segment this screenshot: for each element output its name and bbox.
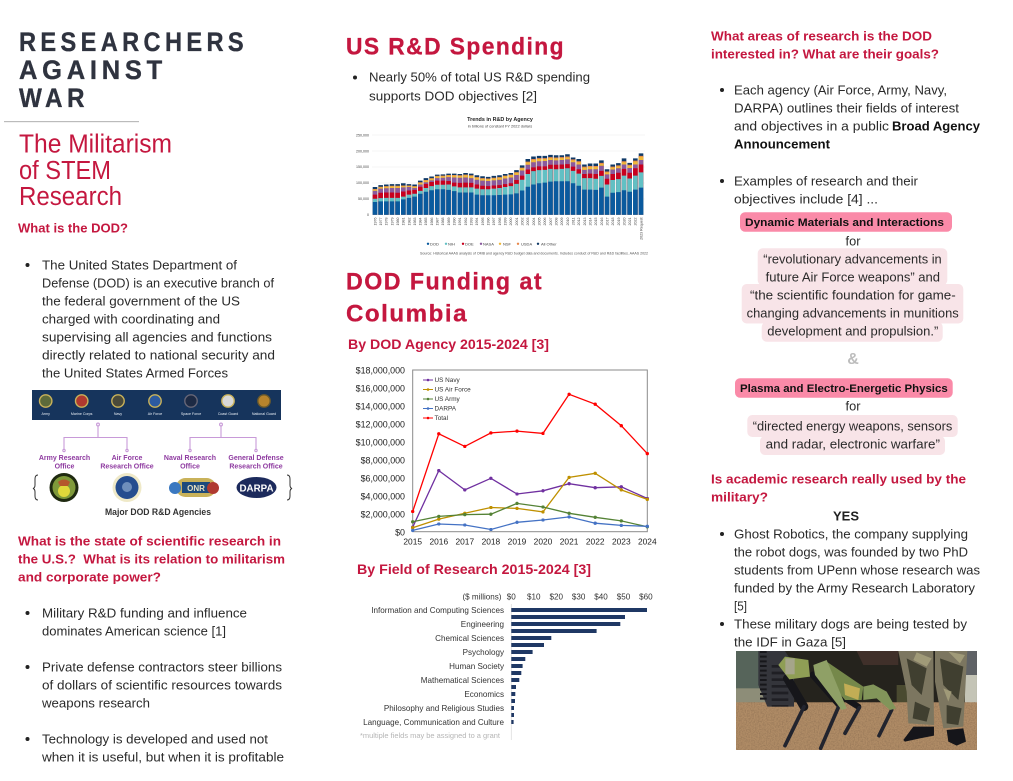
- y axis labels: $6,000,000: [361, 474, 405, 484]
- panel: middle column: [346, 33, 657, 740]
- y axis labels: $16,000,000: [356, 384, 405, 394]
- stacked bars: [375, 153, 641, 215]
- category labels: Psychology: [463, 648, 505, 657]
- chart: trends in R&D by agency: in billions of constant FY 2022 dollars: [468, 124, 532, 128]
- x axis years: 1998: [498, 218, 502, 226]
- chart title: Trends in R&D by Agency: [467, 117, 533, 123]
- text block: ghost robotics: [720, 526, 980, 650]
- panel: left column: [4, 27, 292, 764]
- x axis years: 1991: [458, 218, 462, 226]
- braces: [33, 475, 292, 500]
- text block: nearly 50%: supports DOD objectives [2]: [369, 88, 537, 104]
- x axis years: 2013: [583, 218, 587, 226]
- category labels: Chemical Sciences: [435, 634, 504, 643]
- value axis: $40: [594, 592, 608, 602]
- x axis years: 2007: [549, 218, 553, 226]
- title: AGAINST: [19, 55, 167, 85]
- y axis labels: [356, 366, 405, 538]
- text block: ghost robotics: the IDF in Gaza [5]: [734, 634, 846, 650]
- y axis: 0: [367, 213, 369, 217]
- legend: NSF: [503, 241, 512, 246]
- answer: yes: YES: [833, 508, 859, 524]
- y axis labels: $2,000,000: [361, 510, 405, 520]
- x axis years: 2011: [572, 218, 576, 225]
- source note: Source: Historical AAAS analysis of OMB and agency R&D budget data and documents. Includes conduct of R&D and R&D facilities. AAAS 2022: [420, 252, 648, 256]
- text block: examples intro: Examples of research and their: [734, 174, 919, 188]
- office labels: General Defense: [228, 455, 284, 462]
- text block: ghost robotics: funded by the Army Research Laboratory: [734, 580, 976, 596]
- legend: NASA: [483, 241, 494, 246]
- armed forces banner: [32, 390, 281, 420]
- heading: by field of research: By Field of Research 2015-2024 [3]: [357, 561, 591, 577]
- x axis years: 2006: [543, 218, 547, 226]
- legend: [427, 241, 557, 246]
- x axis years: 1976: [373, 218, 377, 226]
- x axis years: 2000: [509, 218, 513, 226]
- text block: military R&D bullets: when it is useful, but when it is profitable: [41, 750, 284, 764]
- legend: DOD: [430, 241, 439, 246]
- x axis years: 1990: [453, 218, 457, 226]
- y axis labels: $12,000,000: [356, 420, 405, 430]
- legend: US Army: [434, 396, 461, 403]
- x axis years: 1993: [470, 218, 474, 226]
- value axis: [462, 592, 653, 602]
- diagram: major DOD R&D agencies: [32, 390, 292, 517]
- callout: dynamic materials: [740, 212, 963, 342]
- x axis labels: 2022: [586, 536, 605, 546]
- x axis years: 2010: [566, 218, 570, 226]
- text block: military R&D bullets: Military R&D funding and influence: [42, 606, 247, 620]
- armed forces banner: Space Force: [181, 412, 201, 416]
- x axis labels: 2019: [508, 536, 527, 546]
- x axis years: 2018: [611, 218, 615, 226]
- diagram caption: Major DOD R&D Agencies: [105, 507, 211, 517]
- legend: US Navy: [434, 377, 461, 384]
- value axis: $10: [527, 592, 541, 602]
- office labels: Air Force: [112, 455, 142, 462]
- x axis years: 2022: [634, 218, 638, 226]
- x axis years: 1988: [441, 218, 445, 226]
- heading: areas of research: What areas of research is the DOD: [711, 28, 932, 44]
- office labels: Research Office: [100, 463, 154, 470]
- armed forces banner: Air Force: [148, 412, 162, 416]
- callout: plasma physics: [735, 378, 958, 455]
- x axis years: 1999: [504, 218, 508, 226]
- value axis: $20: [549, 592, 563, 602]
- dog body: [778, 657, 810, 679]
- x axis years: 1985: [424, 218, 428, 226]
- x axis years: 2016: [600, 218, 604, 226]
- heading: state of scientific research: the U.S.? What is its relation to militarism: [18, 552, 285, 566]
- callout: dynamic materials: changing advancements in munitions: [747, 306, 959, 320]
- x axis years: 1989: [447, 218, 451, 226]
- x axis labels: [403, 536, 657, 546]
- x axis years: 1995: [481, 218, 485, 226]
- x axis years: 2005: [538, 218, 542, 226]
- category labels: Mathematical Sciences: [421, 676, 504, 685]
- x axis years: 2008: [554, 218, 558, 226]
- heading: DOD funding at Columbia: DOD Funding at: [346, 268, 543, 296]
- x axis years: 2004: [532, 218, 536, 226]
- callout: dynamic materials: development and propulsion.”: [767, 324, 938, 338]
- photo: robot dog beside soldier: [736, 651, 977, 750]
- category labels: Engineering: [461, 620, 504, 629]
- value axis: $60: [639, 592, 653, 602]
- footnote: *multiple fields may be assigned to a grant: [360, 731, 500, 740]
- y axis labels: $18,000,000: [356, 366, 405, 376]
- plot frame: [413, 370, 647, 532]
- office labels: [39, 455, 284, 470]
- heading: is academic research used: [711, 472, 966, 504]
- callout: dynamic materials: “the scientific foundation for game-: [750, 288, 956, 302]
- heading: DOD funding at Columbia: [346, 268, 543, 328]
- category labels: Human Society: [449, 662, 505, 671]
- x axis labels: 2017: [455, 536, 474, 546]
- x axis years: 1996: [486, 218, 490, 226]
- value axis: ($ millions): [462, 592, 502, 602]
- y axis: 150,000: [356, 165, 369, 169]
- x axis years: 2001: [515, 218, 519, 226]
- callout: plasma physics: for: [846, 398, 861, 414]
- x axis years: 2003: [526, 218, 530, 226]
- heading: is academic research used: military?: [711, 490, 768, 504]
- category labels: Economics: [464, 690, 504, 699]
- office labels: Naval Research: [164, 455, 216, 462]
- x axis years: 1987: [436, 218, 440, 226]
- title: RESEARCHERS: [19, 27, 248, 57]
- callout: plasma physics: Plasma and Electro-Energetic Physics: [740, 383, 948, 395]
- armed forces banner: Marine Corps: [71, 412, 93, 416]
- text block: broad agency announcement: Each agency (Air Force, Army, Navy,: [734, 82, 947, 98]
- text block: broad agency announcement: [720, 82, 981, 152]
- text block: nearly 50%: Nearly 50% of total US R&D spending: [369, 70, 590, 85]
- armed forces banner: Navy: [114, 412, 122, 416]
- category labels: Language, Communication and Culture: [363, 718, 504, 727]
- dog limbs: [785, 675, 892, 748]
- subtitle: of STEM: [19, 157, 111, 185]
- legend: US Air Force: [434, 387, 471, 394]
- text block: ghost robotics: the robot dogs, was founded by two PhD: [734, 544, 968, 560]
- text block: military R&D bullets: of dollars of scientific resources towards: [42, 678, 282, 692]
- text block: DOD definition: supervising all agencies and functions: [42, 330, 272, 344]
- text block: DOD definition: charged with coordinating and: [42, 312, 220, 326]
- x axis years: 2021: [628, 218, 632, 226]
- text block: military R&D bullets: weapons research: [41, 696, 150, 710]
- title: WAR: [19, 83, 89, 113]
- legend: Total: [434, 415, 448, 422]
- x axis years: 2015: [594, 218, 598, 226]
- soldier: [898, 651, 967, 728]
- agency logos: ONR: [187, 484, 205, 493]
- x axis years: 2002: [520, 218, 524, 226]
- heading: state of scientific research: [18, 534, 285, 584]
- y axis: 250,000: [356, 134, 369, 138]
- x axis labels: 2016: [429, 536, 448, 546]
- y axis: 100,000: [356, 181, 369, 185]
- office labels: Office: [180, 463, 200, 470]
- y axis labels: $10,000,000: [356, 438, 405, 448]
- office labels: Research Office: [229, 463, 283, 470]
- connector lines: [63, 423, 257, 452]
- text block: broad agency announcement: Announcement: [734, 136, 831, 152]
- x axis labels: 2021: [560, 536, 579, 546]
- x axis years: 1986: [430, 218, 434, 226]
- category labels: [363, 606, 505, 727]
- title: [19, 27, 248, 113]
- y axis: 200,000: [356, 149, 369, 153]
- y axis labels: $4,000,000: [361, 492, 405, 502]
- callout: plasma physics: “directed energy weapons, sensors: [753, 418, 952, 434]
- callout: dynamic materials: “revolutionary advancements in: [763, 252, 942, 266]
- armed forces banner: Army: [42, 412, 50, 416]
- heading: what is the DOD: What is the DOD?: [18, 220, 128, 235]
- text block: broad agency announcement: DARPA) outlines their fields of interest: [734, 100, 959, 116]
- legend: DOE: [465, 241, 474, 246]
- x axis labels: 2023: [612, 536, 631, 546]
- legend: NIH: [448, 241, 455, 246]
- x axis years: 2009: [560, 218, 564, 226]
- legend: [423, 377, 471, 422]
- text block: DOD definition: the United States Armed Forces: [42, 366, 228, 380]
- subtitle: [19, 131, 172, 211]
- line chart: funding by DOD agency: [356, 366, 657, 546]
- text block: DOD definition: Defense (DOD) is an executive branch of: [42, 276, 274, 290]
- series lines: [413, 394, 647, 530]
- legend: All Other: [541, 241, 557, 246]
- x axis years: 1984: [419, 218, 423, 226]
- x axis years: 2019: [617, 218, 621, 226]
- legend: USDA: [521, 241, 532, 246]
- panel: right column: [711, 28, 981, 750]
- text block: DOD definition: the federal government of the US: [42, 294, 240, 308]
- bars: [511, 608, 647, 724]
- armed forces banner: Coast Guard: [218, 412, 238, 416]
- y axis labels: $8,000,000: [361, 456, 405, 466]
- x axis labels: 2018: [482, 536, 501, 546]
- chart: trends in R&D by agency: [356, 117, 648, 256]
- text block: ghost robotics: These military dogs are being tested by: [734, 616, 968, 632]
- heading: by DOD agency: By DOD Agency 2015-2024 [3]: [348, 336, 549, 352]
- heading: state of scientific research: and corporate power?: [18, 570, 161, 584]
- x axis years: 1980: [396, 218, 400, 226]
- x axis years: 2012: [577, 218, 581, 226]
- heading: US R&D spending: US R&D Spending: [346, 33, 565, 60]
- value axis: $0: [507, 592, 516, 602]
- x axis labels: 2020: [534, 536, 553, 546]
- text block: broad agency announcement: and objectives in a public: [734, 118, 890, 134]
- text block: DOD definition: directly related to national security and: [42, 348, 275, 362]
- x axis years: 1978: [385, 218, 389, 226]
- text block: military R&D bullets: [26, 606, 284, 764]
- text block: ghost robotics: Ghost Robotics, the company supplying: [734, 526, 968, 542]
- text block: ghost robotics: [5]: [734, 598, 747, 614]
- callout: dynamic materials: future Air Force weapons” and: [766, 270, 940, 284]
- x axis years: 2020: [622, 218, 626, 226]
- x axis years: 1994: [475, 218, 479, 226]
- ampersand: &: [847, 351, 859, 368]
- callout: dynamic materials: Dynamic Materials and Interactions: [745, 217, 944, 229]
- x axis years: 1979: [390, 218, 394, 226]
- y axis: [356, 134, 645, 217]
- x axis years: 1997: [492, 218, 496, 226]
- y axis: 50,000: [358, 197, 369, 201]
- text block: examples intro: objectives include [4] ...: [734, 192, 878, 206]
- armed forces banner: National Guard: [252, 412, 276, 416]
- text block: military R&D bullets: Technology is developed and used not: [42, 732, 268, 746]
- agency logos: [50, 473, 276, 502]
- x axis years: 2014: [588, 218, 592, 226]
- text block: examples intro: [720, 174, 919, 206]
- bar chart: funding by field of research: [360, 592, 653, 740]
- y axis labels: $14,000,000: [356, 402, 405, 412]
- text block: military R&D bullets: Private defense contractors steer billions: [42, 660, 282, 674]
- x axis years: 1992: [464, 218, 468, 226]
- category labels: Information and Computing Sciences: [371, 606, 504, 615]
- text block: nearly 50%: [353, 70, 590, 104]
- callout: plasma physics: and radar, electronic warfare”: [766, 436, 940, 452]
- value axis: $50: [617, 592, 631, 602]
- text block: ghost robotics: students from UPenn whose research was: [734, 562, 980, 578]
- x axis labels: 2024: [638, 536, 657, 546]
- subtitle: The Militarism: [19, 131, 172, 159]
- x axis years: 2023 Request: [639, 218, 643, 240]
- subtitle: Research: [19, 183, 122, 211]
- x axis labels: 2015: [403, 536, 422, 546]
- legend: DARPA: [434, 406, 457, 413]
- x axis years: 1983: [413, 218, 417, 226]
- text block: military R&D bullets: dominates American science [1]: [42, 624, 226, 638]
- heading: DOD funding at Columbia: Columbia: [346, 300, 468, 328]
- category labels: Philosophy and Religious Studies: [384, 704, 504, 713]
- x axis years: 1981: [402, 218, 406, 226]
- heading: areas of research: [711, 28, 939, 62]
- x axis years: 2017: [605, 218, 609, 226]
- y axis labels: $0: [395, 528, 405, 538]
- heading: is academic research used: Is academic research really used by the: [711, 472, 966, 486]
- heading: areas of research: interested in? What are their goals?: [711, 46, 939, 62]
- text block: broad agency announcement: Broad Agency: [892, 118, 981, 134]
- x axis years: 1977: [379, 218, 383, 226]
- agency logos: DARPA: [240, 482, 274, 494]
- office labels: Army Research: [39, 455, 90, 462]
- x axis years: [373, 218, 643, 240]
- x axis years: 1982: [407, 218, 411, 226]
- text block: DOD definition: [26, 258, 275, 380]
- callout: dynamic materials: for: [846, 234, 861, 248]
- text block: DOD definition: The United States Department of: [42, 258, 237, 272]
- tire: [758, 651, 794, 707]
- office labels: Office: [55, 463, 75, 470]
- value axis: $30: [572, 592, 586, 602]
- heading: state of scientific research: What is the state of scientific research in: [18, 534, 281, 548]
